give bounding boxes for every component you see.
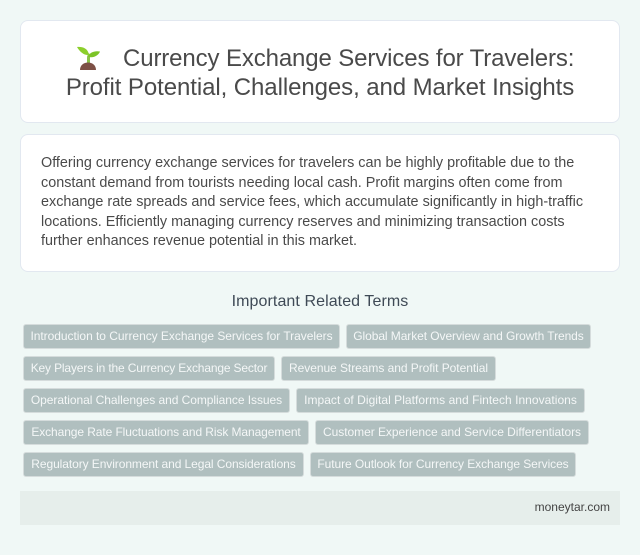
tag xyxy=(23,324,340,349)
summary text: constant demand from tourists needing local cash. Profit margins often come from xyxy=(41,174,563,190)
tag xyxy=(23,452,304,477)
summary text: further enhances revenue potential in this market. xyxy=(41,233,357,249)
tag xyxy=(23,388,290,413)
summary text: locations. Efficiently managing currency reserves and minimizing transaction costs xyxy=(41,214,565,230)
tag xyxy=(315,420,589,445)
title line 1: Currency Exchange Services for Travelers: xyxy=(123,45,574,72)
heading: important related terms: Important Related Terms xyxy=(232,293,408,310)
summary text xyxy=(41,155,583,249)
icon: seedling xyxy=(77,46,100,70)
footer source text: moneytar.com xyxy=(535,500,610,514)
panel: title card xyxy=(20,20,620,123)
tag xyxy=(23,356,275,381)
tag xyxy=(23,420,309,445)
tag: Global Market Overview and Growth Trends xyxy=(353,329,584,343)
tag: Exchange Rate Fluctuations and Risk Management xyxy=(31,425,301,439)
tag: Regulatory Environment and Legal Considerations xyxy=(31,457,296,471)
footer bar xyxy=(20,491,620,525)
tag xyxy=(310,452,576,477)
panel: summary card xyxy=(20,134,620,272)
title line 2: Profit Potential, Challenges, and Market Insights xyxy=(66,74,574,101)
tag: Operational Challenges and Compliance Issues xyxy=(31,393,282,407)
tag xyxy=(296,388,585,413)
summary text: Offering currency exchange services for travelers can be highly profitable due to the xyxy=(41,155,574,171)
tag: Key Players in the Currency Exchange Sector xyxy=(31,361,267,375)
tag: Impact of Digital Platforms and Fintech Innovations xyxy=(304,393,577,407)
tag xyxy=(281,356,496,381)
tag xyxy=(346,324,591,349)
summary text: exchange rate spreads and service fees, which accumulate significantly in high-traffic xyxy=(41,194,583,210)
tag: Customer Experience and Service Differentiators xyxy=(323,425,581,439)
tag: Future Outlook for Currency Exchange Services xyxy=(317,457,569,471)
tag: Introduction to Currency Exchange Services for Travelers xyxy=(30,329,333,343)
tag: Revenue Streams and Profit Potential xyxy=(289,361,488,375)
tag group xyxy=(23,324,591,477)
